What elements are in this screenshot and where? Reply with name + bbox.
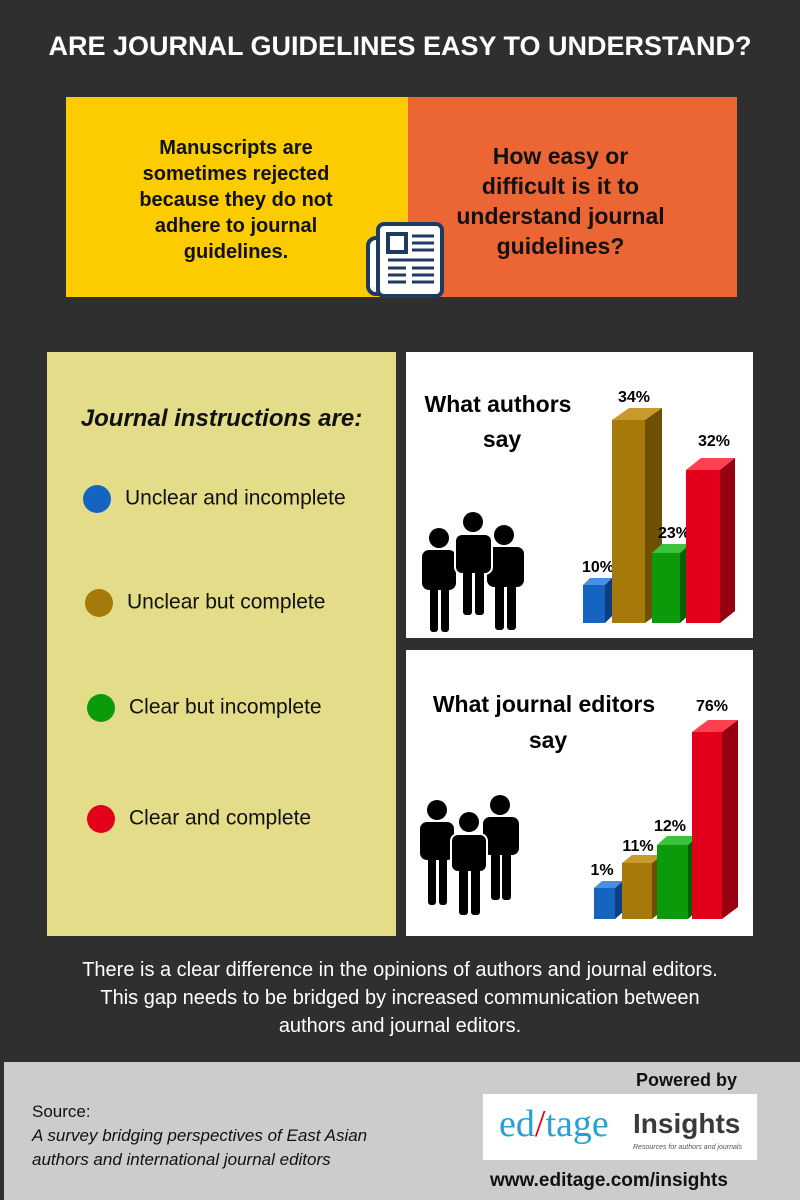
icon: newspaper bbox=[366, 222, 444, 298]
bar chart bbox=[582, 389, 735, 623]
legend item: clear and complete bbox=[87, 805, 311, 833]
source text: Source: bbox=[32, 1102, 91, 1121]
bar chart: 12% bbox=[654, 818, 686, 835]
panel: authors chart: say bbox=[483, 426, 521, 452]
statement text bbox=[139, 137, 333, 263]
panel: orange question bbox=[408, 97, 737, 297]
panel: legend bbox=[47, 352, 396, 936]
logo: editage insights: ed/tage bbox=[499, 1103, 609, 1145]
logo: editage insights: Resources for authors and journals bbox=[633, 1144, 742, 1151]
question text: difficult is it to bbox=[482, 173, 639, 199]
logo: editage insights: Insights bbox=[633, 1108, 740, 1139]
source text: A survey bridging perspectives of East Asian bbox=[32, 1126, 367, 1145]
website url: www.editage.com/insights bbox=[490, 1170, 728, 1191]
bar chart: 32% bbox=[698, 433, 730, 450]
chart title: What journal editors bbox=[433, 691, 655, 717]
legend item: unclear and incomplete: Unclear and incomplete bbox=[125, 487, 346, 510]
legend item: unclear but complete: Unclear but complete bbox=[127, 591, 325, 614]
bar chart: 34% bbox=[618, 389, 650, 406]
panel: authors chart bbox=[406, 352, 753, 638]
panel: editors chart bbox=[406, 650, 753, 936]
question text bbox=[456, 143, 665, 259]
statement text: sometimes rejected bbox=[143, 163, 329, 185]
legend item: clear but incomplete bbox=[87, 694, 322, 722]
icon: people bbox=[422, 512, 524, 632]
bar chart: 76% bbox=[696, 698, 728, 715]
question text: How easy or bbox=[493, 143, 628, 169]
statement text: guidelines. bbox=[184, 241, 288, 263]
question text: understand journal bbox=[456, 203, 665, 229]
bar chart: 1% bbox=[590, 862, 614, 879]
conclusion text bbox=[82, 959, 718, 1037]
panel: editors chart: say bbox=[529, 727, 567, 753]
conclusion text: There is a clear difference in the opinions of authors and journal editors. bbox=[82, 959, 718, 981]
panel: yellow statement bbox=[66, 97, 408, 297]
bar chart bbox=[590, 698, 738, 919]
legend item: clear and complete: Clear and complete bbox=[129, 807, 311, 830]
powered by: Powered by bbox=[636, 1070, 737, 1090]
bar chart: 23% bbox=[658, 525, 690, 542]
footer bbox=[4, 1062, 800, 1200]
legend heading: Journal instructions are: bbox=[81, 405, 362, 432]
conclusion text: authors and journal editors. bbox=[279, 1015, 521, 1037]
source text bbox=[31, 1102, 367, 1169]
question text: guidelines? bbox=[497, 233, 624, 259]
bar chart: 11% bbox=[622, 838, 654, 855]
statement text: because they do not bbox=[139, 189, 333, 211]
legend item: unclear and incomplete bbox=[83, 485, 346, 513]
legend item: clear but incomplete: Clear but incomplete bbox=[129, 696, 322, 719]
chart title: What authors bbox=[425, 391, 571, 417]
statement text: Manuscripts are bbox=[159, 137, 313, 159]
bar chart: 10% bbox=[582, 559, 614, 576]
statement text: adhere to journal bbox=[155, 215, 317, 237]
icon: people bbox=[420, 795, 519, 915]
legend item: unclear but complete bbox=[85, 589, 325, 617]
source text: authors and international journal editors bbox=[32, 1150, 331, 1169]
conclusion text: This gap needs to be bridged by increased communication between bbox=[100, 987, 700, 1009]
logo: editage insights bbox=[483, 1094, 757, 1160]
title: ARE JOURNAL GUIDELINES EASY TO UNDERSTAND? bbox=[48, 31, 752, 61]
